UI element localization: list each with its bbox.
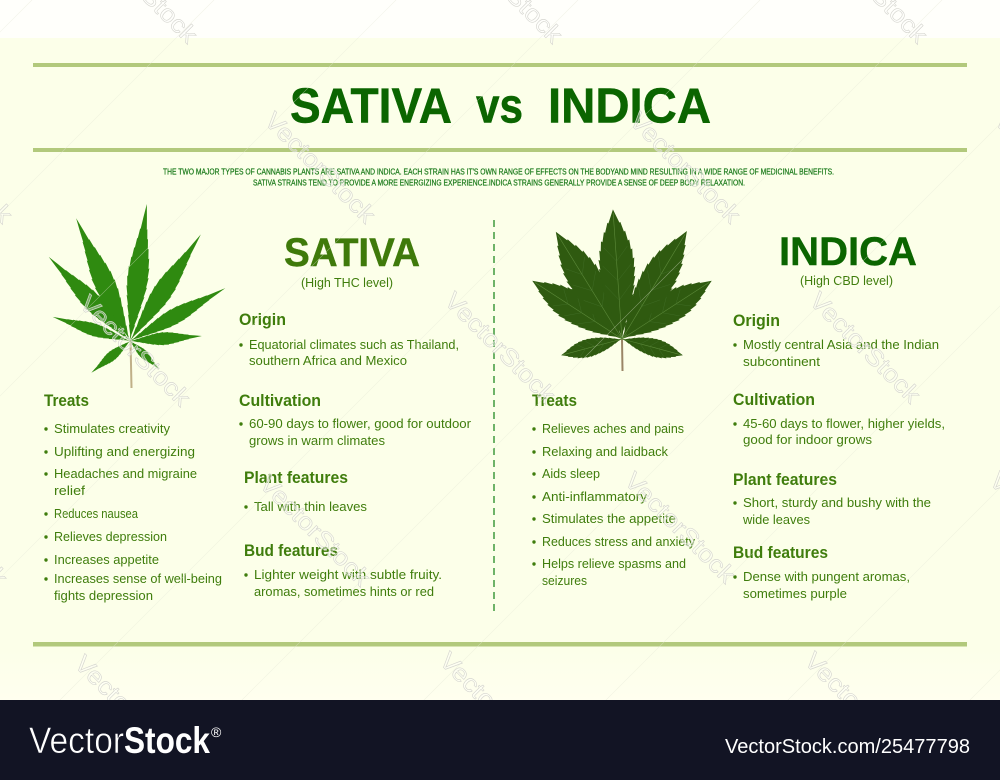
sativa bud features xyxy=(244,542,442,599)
indica origin xyxy=(733,312,939,369)
sativa treats list: Increases sense of well-being xyxy=(54,571,222,586)
sativa treats list: Headaches and migraine xyxy=(54,466,197,481)
sativa bud features: Lighter weight with subtle fruity. xyxy=(254,567,442,582)
indica bud features: sometimes purple xyxy=(743,586,847,601)
indica cultivation: 45-60 days to flower, higher yields, xyxy=(743,416,945,431)
text: VectorStock xyxy=(624,107,746,230)
indica cultivation: Cultivation xyxy=(733,391,815,409)
title: vs xyxy=(476,80,523,134)
bottom rule xyxy=(33,642,967,646)
sativa treats list xyxy=(44,392,222,603)
text: VectorStock xyxy=(434,647,556,770)
sativa cultivation: grows in warm climates xyxy=(249,433,385,448)
indica treats list: seizures xyxy=(542,573,587,588)
sativa cultivation: Cultivation xyxy=(239,392,321,410)
sativa treats list: Reduces nausea xyxy=(54,506,139,521)
indica origin: Origin xyxy=(733,312,780,330)
intro text: SATIVA STRAINS TEND TO PROVIDE A MORE ENERGIZING EXPERIENCE.INDICA STRAINS GENERALLY PROVIDE A SENSE OF DEEP BODY RELAXATION. xyxy=(253,178,745,188)
sativa treats list: Treats xyxy=(44,392,89,410)
indica treats list: Treats xyxy=(532,392,577,410)
indica origin: Mostly central Asia and the Indian xyxy=(743,337,939,352)
sativa plant features: Plant features xyxy=(244,469,348,487)
indica treats list: Aids sleep xyxy=(542,466,600,481)
sativa bud features: aromas, sometimes hints or red xyxy=(254,584,434,599)
sativa cultivation xyxy=(239,392,472,448)
intro text: THE TWO MAJOR TYPES OF CANNABIS PLANTS ARE SATIVA AND INDICA. EACH STRAIN HAS IT'S OWN RANGE OF EFFECTS ON THE BODYAND MIND RESULTING IN A WIDE RANGE OF MEDICINAL BENEFITS. xyxy=(163,166,834,176)
indica treats list: Relieves aches and pains xyxy=(542,421,684,436)
text: VectorStock xyxy=(799,647,921,770)
sativa cultivation: 60-90 days to flower, good for outdoor xyxy=(249,416,472,431)
text: VectorStock xyxy=(254,470,376,593)
icon: indica leaf xyxy=(524,208,720,371)
indica bud features: Bud features xyxy=(733,544,828,562)
indica origin: subcontinent xyxy=(743,354,820,369)
sativa origin: Origin xyxy=(239,311,286,329)
indica subtitle: (High CBD level) xyxy=(800,274,893,288)
sativa heading: SATIVA xyxy=(284,231,420,275)
indica plant features: wide leaves xyxy=(742,512,810,527)
sativa origin: southern Africa and Mexico xyxy=(249,353,407,368)
title: INDICA xyxy=(548,80,711,134)
center dashed divider xyxy=(493,220,495,612)
sativa plant features xyxy=(244,469,367,514)
indica plant features: Short, sturdy and bushy with the xyxy=(743,495,931,510)
title rule top xyxy=(33,63,967,67)
sativa treats list: Increases appetite xyxy=(54,552,159,567)
indica heading: INDICA xyxy=(779,230,917,274)
text: VectorStock xyxy=(259,107,381,230)
text: VectorStock xyxy=(619,467,741,590)
sativa treats list: Uplifting and energizing xyxy=(54,444,195,459)
title rule bottom xyxy=(33,148,967,152)
indica cultivation xyxy=(733,391,945,447)
footer url: VectorStock.com/25477798 xyxy=(725,735,970,758)
sativa origin: Equatorial climates such as Thailand, xyxy=(249,337,459,352)
text: VectorStock xyxy=(804,287,926,410)
text: VectorStock xyxy=(74,290,196,413)
indica treats list: Reduces stress and anxiety xyxy=(542,534,695,549)
sativa treats list: Relieves depression xyxy=(54,529,167,544)
icon: sativa leaf xyxy=(42,203,229,388)
indica bud features: Dense with pungent aromas, xyxy=(743,569,910,584)
indica treats list xyxy=(532,392,695,588)
sativa treats list: fights depression xyxy=(54,588,153,603)
sativa subtitle: (High THC level) xyxy=(301,276,393,290)
footer logo: Vector xyxy=(29,720,124,761)
footer bar xyxy=(0,700,1000,780)
indica cultivation: good for indoor grows xyxy=(743,432,872,447)
sativa treats list: Stimulates creativity xyxy=(54,421,170,436)
title: SATIVA xyxy=(290,80,452,134)
indica treats list: Relaxing and laidback xyxy=(542,444,668,459)
sativa origin xyxy=(239,311,459,368)
sativa treats list: relief xyxy=(54,483,85,498)
intro text xyxy=(163,166,834,188)
indica bud features xyxy=(733,544,910,601)
footer logo xyxy=(29,720,222,761)
sativa bud features: Bud features xyxy=(244,542,338,560)
text: VectorStock xyxy=(439,287,561,410)
indica plant features: Plant features xyxy=(733,471,837,489)
sativa plant features: Tall with thin leaves xyxy=(254,499,367,514)
indica treats list: Stimulates the appetite xyxy=(542,511,676,526)
indica treats list: Anti-inflammatory xyxy=(542,489,647,504)
title xyxy=(290,80,711,134)
text: VectorStock xyxy=(69,650,191,773)
indica plant features xyxy=(733,471,931,527)
indica treats list: Helps relieve spasms and xyxy=(542,556,686,571)
footer logo: Stock xyxy=(124,720,210,761)
footer logo: ® xyxy=(211,724,222,740)
